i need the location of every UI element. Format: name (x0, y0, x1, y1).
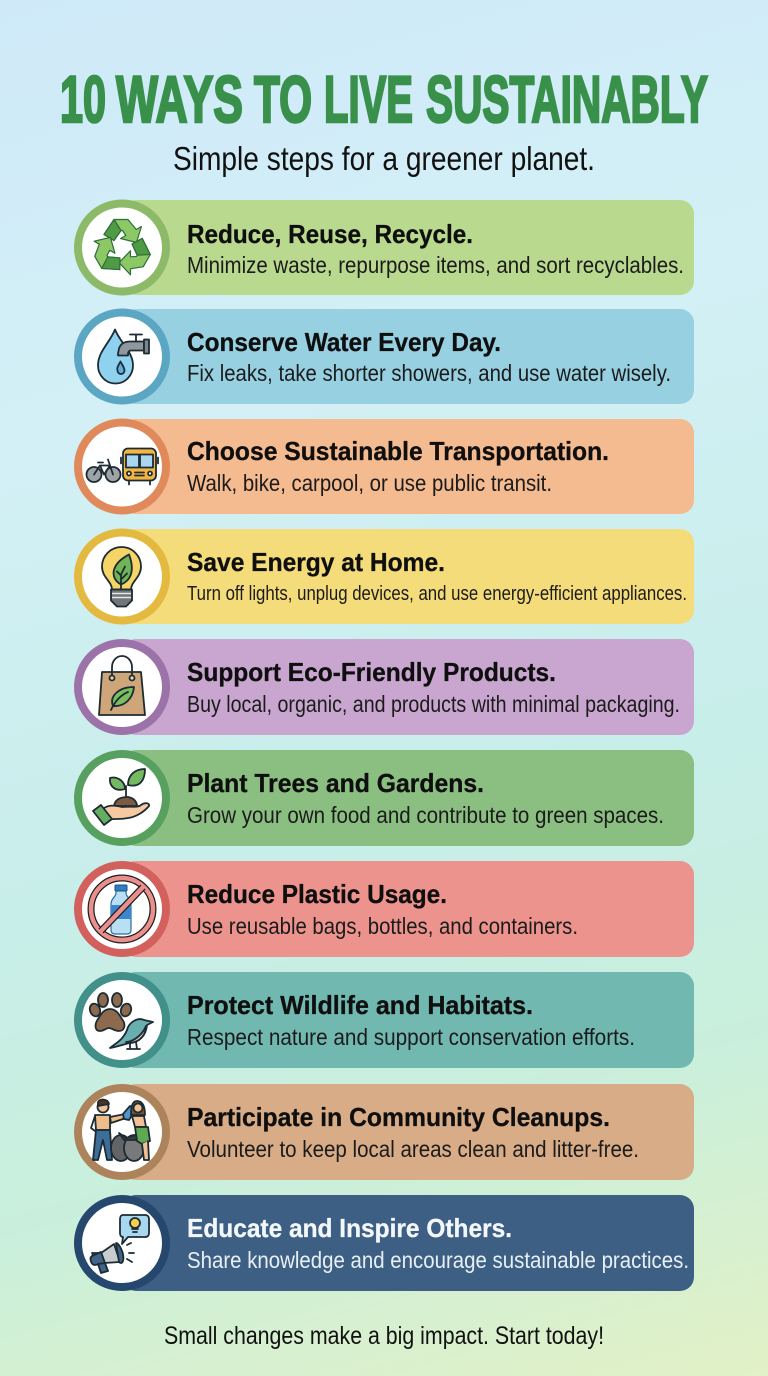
panel: community cleanups (78, 1084, 694, 1180)
bar (122, 750, 694, 846)
heading: Educate and Inspire Others. (187, 1213, 512, 1243)
title: TO (254, 62, 312, 136)
heading: Reduce Plastic Usage. (187, 879, 447, 909)
footer: Small changes make a big impact. Start today! (164, 1322, 604, 1350)
heading: Choose Sustainable Transportation. (187, 436, 609, 466)
description: Walk, bike, carpool, or use public transit. (187, 470, 552, 496)
panel: reduce plastic (78, 861, 694, 957)
panel: protect wildlife (78, 972, 694, 1068)
icon: no plastic bottle (78, 865, 166, 953)
description: Use reusable bags, bottles, and containers. (187, 913, 578, 939)
heading: Conserve Water Every Day. (187, 327, 501, 357)
bar (122, 861, 694, 957)
panel: reduce, reuse, recycle (78, 200, 694, 295)
description: Buy local, organic, and products with minimal packaging. (187, 691, 680, 717)
title (60, 62, 708, 136)
panel: save energy (78, 529, 694, 624)
icon: paw print and bird (78, 976, 166, 1064)
description: Share knowledge and encourage sustainable practices. (187, 1247, 689, 1273)
icon: hand holding seedling (78, 754, 166, 842)
bar (122, 1195, 694, 1291)
subtitle: Simple steps for a greener planet. (173, 140, 595, 177)
icon: volunteers with trash bag (78, 1088, 166, 1176)
icon: megaphone with idea bubble (78, 1199, 166, 1287)
description: Grow your own food and contribute to green spaces. (187, 802, 664, 828)
heading: Support Eco-Friendly Products. (187, 657, 556, 687)
icon: water drop and faucet (78, 312, 166, 400)
heading: Protect Wildlife and Habitats. (187, 990, 533, 1020)
heading: Reduce, Reuse, Recycle. (187, 219, 473, 249)
title: 10 (60, 62, 106, 136)
panel: educate and inspire (78, 1195, 694, 1291)
description: Respect nature and support conservation efforts. (187, 1024, 635, 1050)
heading: Participate in Community Cleanups. (187, 1102, 610, 1132)
title: LIVE (324, 62, 413, 136)
description: Volunteer to keep local areas clean and litter-free. (187, 1136, 639, 1162)
title: WAYS (116, 62, 243, 136)
bar (122, 419, 694, 514)
bar (122, 1084, 694, 1180)
icon: recycle (78, 204, 166, 292)
panel: plant trees (78, 750, 694, 846)
description: Minimize waste, repurpose items, and sort recyclables. (187, 252, 684, 278)
panel: conserve water (78, 309, 694, 404)
icon: bike and bus (78, 422, 166, 510)
bar (122, 972, 694, 1068)
bar (122, 200, 694, 295)
panel: transportation (78, 419, 694, 514)
description: Fix leaks, take shorter showers, and use water wisely. (187, 360, 671, 386)
bar (122, 639, 694, 735)
icon: light bulb with leaf (78, 532, 166, 620)
bar (122, 529, 694, 624)
heading: Plant Trees and Gardens. (187, 768, 484, 798)
icon: shopping bag with leaf (78, 643, 166, 731)
heading: Save Energy at Home. (187, 547, 445, 577)
panel: eco-friendly products (78, 639, 694, 735)
bar (122, 309, 694, 404)
